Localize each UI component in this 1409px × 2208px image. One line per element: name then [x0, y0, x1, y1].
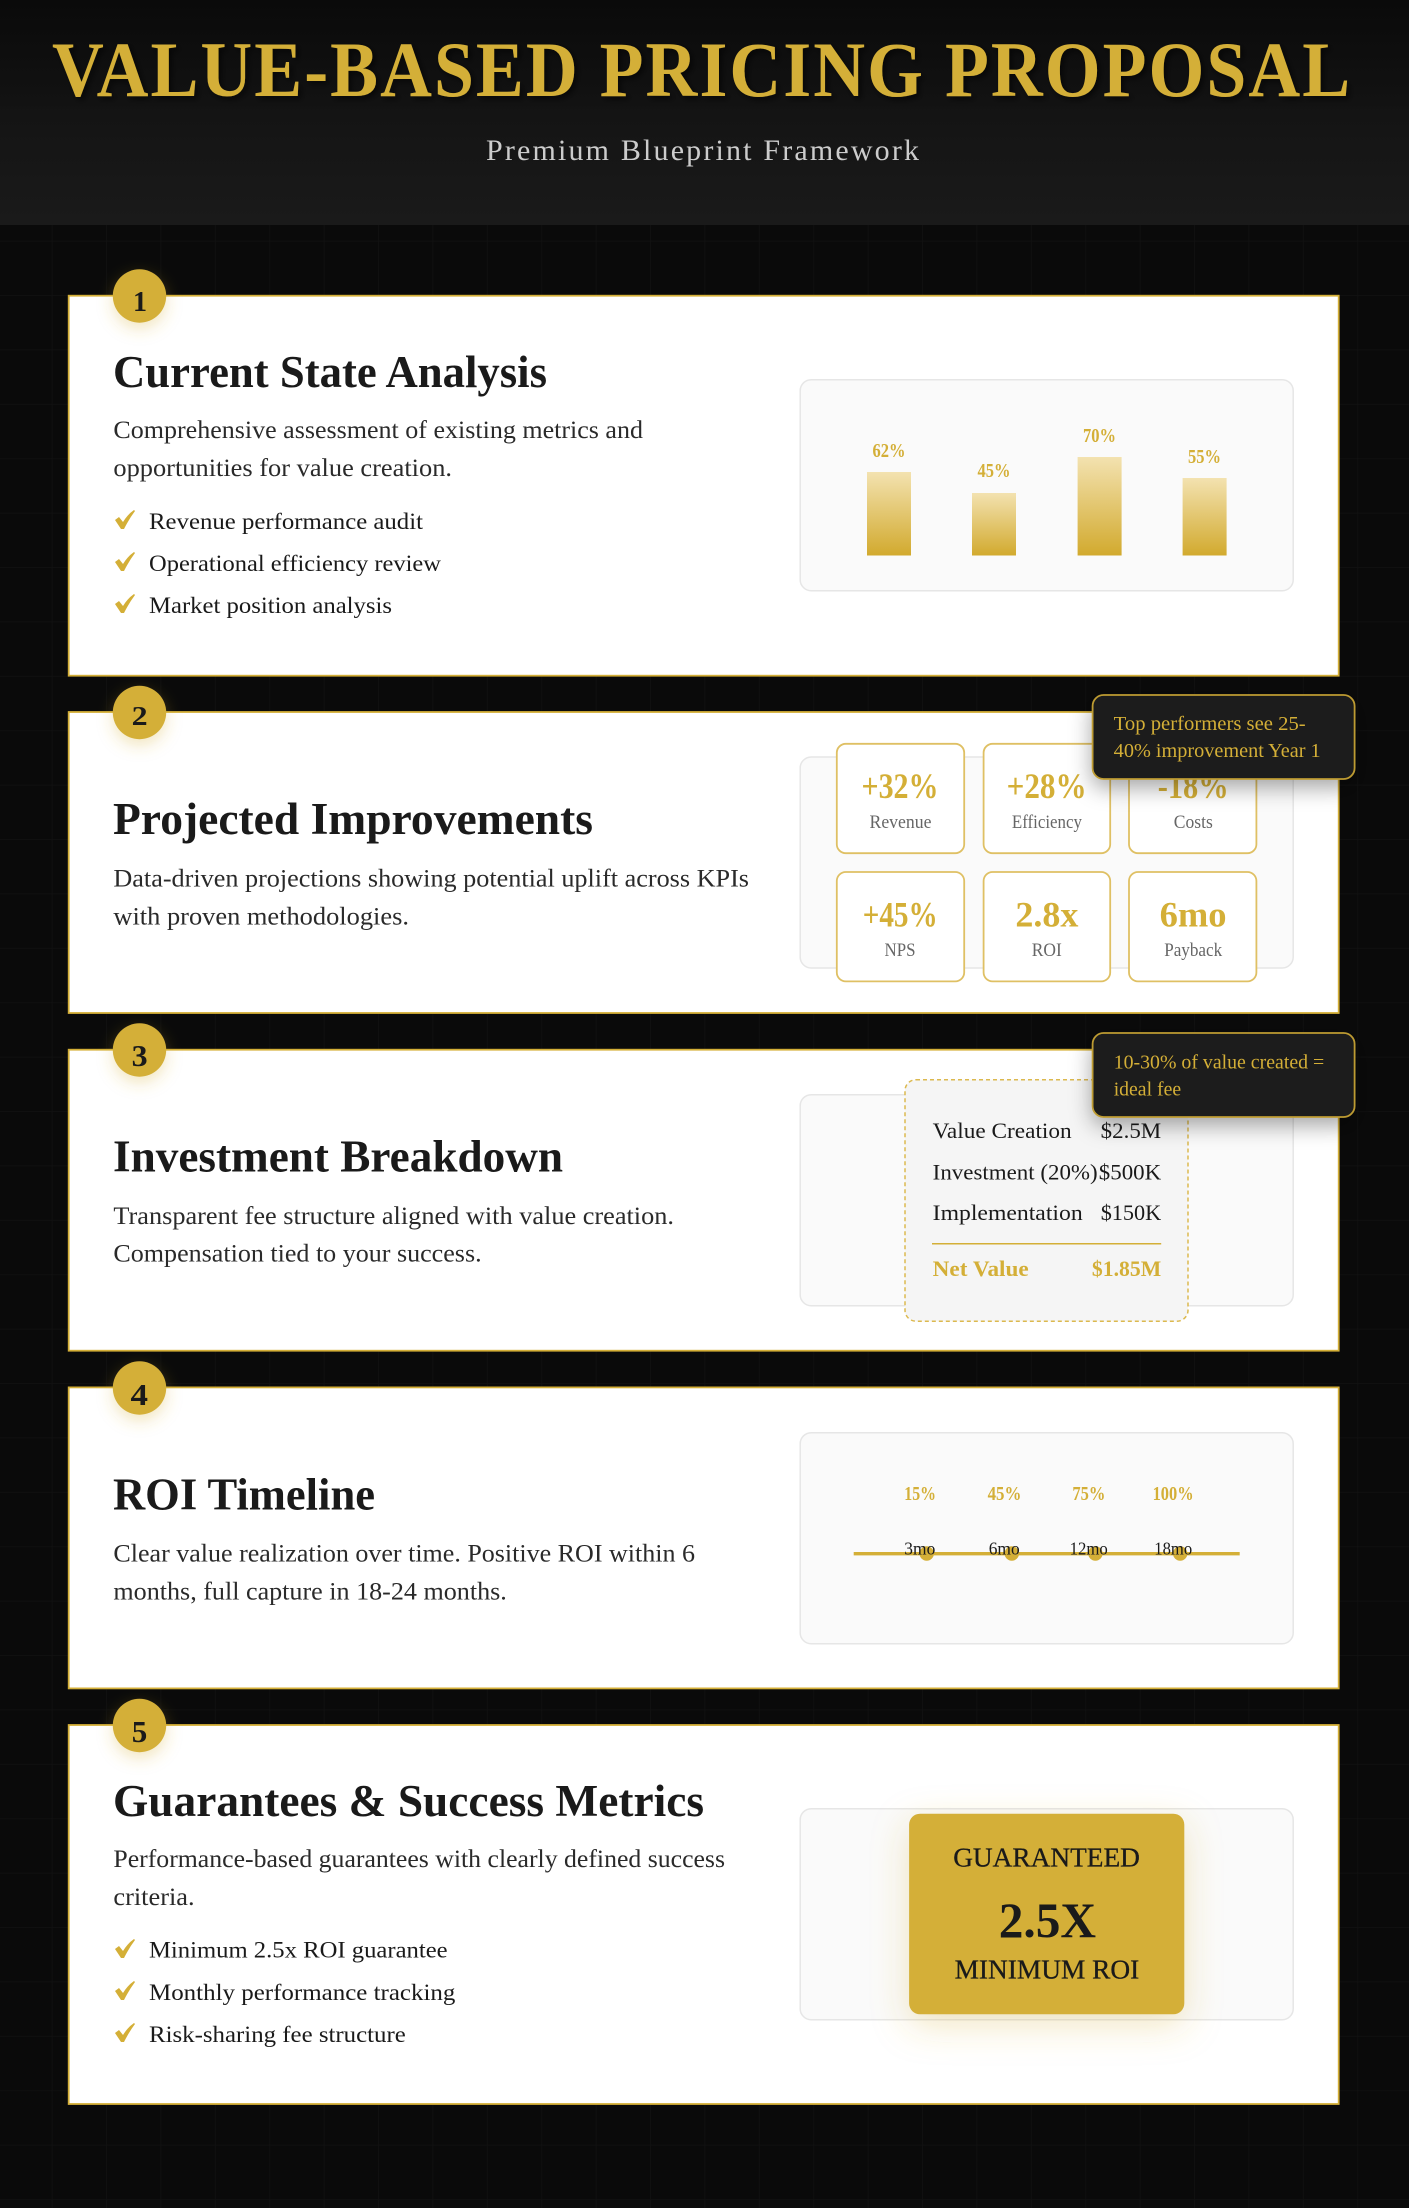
- subtitle: Premium Blueprint Framework: [486, 134, 919, 167]
- timeline chart: [800, 1433, 1293, 1644]
- heading: Investment Breakdown: [113, 1132, 563, 1182]
- guarantee visual: [800, 1809, 1293, 2020]
- timeline chart: 15%: [904, 1484, 936, 1505]
- step badge 4: 4: [130, 1377, 148, 1412]
- callout: top performers: 40% improvement Year 1: [1114, 740, 1321, 762]
- fee table: $2.5M: [1101, 1118, 1161, 1143]
- KPI: costs: -18%: [1158, 766, 1229, 806]
- KPI: efficiency: +28%: [1007, 766, 1087, 806]
- KPI: NPS: +45%: [863, 895, 938, 935]
- panel: Investment Breakdown: [69, 1023, 1355, 1351]
- panel: Guarantees & Success Metrics: [69, 1699, 1339, 2104]
- callout: ideal fee: 10-30% of value created =: [1114, 1051, 1324, 1073]
- heading: Projected Improvements: [113, 794, 593, 844]
- step badge 3: [113, 1023, 166, 1077]
- description: Comprehensive assessment of existing metrics and: [113, 417, 644, 444]
- heading: ROI Timeline: [113, 1470, 375, 1520]
- KPI: payback: Payback: [1164, 941, 1223, 961]
- header: [0, 0, 1409, 225]
- KPI: ROI: [984, 872, 1110, 981]
- guarantee badge: 2.5X: [999, 1892, 1096, 1948]
- checklist: Risk-sharing fee structure: [149, 2022, 406, 2047]
- description: Performance-based guarantees with clearly defined success: [113, 1846, 725, 1873]
- description: [113, 417, 644, 482]
- KPI: NPS: NPS: [884, 941, 916, 961]
- checklist: Monthly performance tracking: [149, 1980, 456, 2005]
- guarantee badge: MINIMUM ROI: [955, 1953, 1139, 1984]
- step badge 1: [113, 269, 166, 323]
- timeline chart: 3mo: [904, 1538, 935, 1558]
- description: Clear value realization over time. Positive ROI within 6: [113, 1541, 695, 1568]
- KPI: revenue: Revenue: [870, 813, 932, 833]
- checklist: Revenue performance audit: [149, 509, 424, 534]
- description: Transparent fee structure aligned with value creation.: [113, 1203, 674, 1230]
- title: VALUE-BASED PRICING PROPOSAL: [52, 27, 1350, 114]
- step badge 5: [113, 1699, 166, 1752]
- panel: Projected Improvements: [69, 686, 1355, 1013]
- description: [113, 1846, 725, 1911]
- KPI: costs: Costs: [1174, 813, 1213, 833]
- bar chart: 45%: [978, 461, 1010, 482]
- step badge 5: 5: [132, 1714, 147, 1749]
- description: [113, 866, 749, 930]
- fee table: [800, 1080, 1293, 1321]
- step badge 2: 2: [132, 701, 148, 731]
- step badge 2: [113, 686, 166, 739]
- KPI: efficiency: Efficiency: [1012, 813, 1083, 833]
- guarantee badge: GUARANTEED: [953, 1842, 1140, 1873]
- checklist: [115, 509, 441, 618]
- KPI: ROI: ROI: [1032, 941, 1062, 961]
- timeline chart: 75%: [1072, 1484, 1105, 1505]
- KPI: efficiency: [984, 744, 1110, 853]
- KPI: costs: [1129, 744, 1256, 853]
- description: criteria.: [113, 1884, 195, 1911]
- fee table: Investment (20%): [933, 1159, 1098, 1184]
- KPI: revenue: +32%: [862, 766, 938, 806]
- step badge 4: [113, 1361, 166, 1415]
- description: Data-driven projections showing potential uplift across KPIs: [113, 866, 749, 892]
- KPI: payback: 6mo: [1160, 895, 1227, 935]
- callout: top performers: [1093, 695, 1355, 779]
- fee table: $150K: [1101, 1200, 1162, 1225]
- bar chart: 70%: [1083, 426, 1116, 447]
- bar chart: 62%: [872, 441, 906, 462]
- checklist: Minimum 2.5x ROI guarantee: [149, 1938, 448, 1963]
- step badge 3: 3: [132, 1038, 148, 1073]
- fee table: $1.85M: [1092, 1256, 1161, 1281]
- description: opportunities for value creation.: [113, 455, 452, 482]
- fee table: Value Creation: [933, 1118, 1072, 1143]
- checklist: [115, 1938, 456, 2047]
- fee table: Net Value: [933, 1256, 1029, 1281]
- KPI: revenue: [837, 744, 964, 853]
- fee table: Implementation: [933, 1200, 1083, 1225]
- bar chart: 55%: [1188, 447, 1221, 468]
- description: [113, 1541, 695, 1605]
- timeline chart: 12mo: [1070, 1538, 1108, 1558]
- guarantee badge: [909, 1814, 1184, 2014]
- heading: Current State Analysis: [113, 347, 547, 397]
- KPI: ROI: 2.8x: [1015, 895, 1078, 935]
- callout: top performers: Top performers see 25-: [1114, 713, 1306, 735]
- callout: ideal fee: ideal fee: [1114, 1079, 1181, 1101]
- KPI grid: [800, 744, 1293, 981]
- timeline chart: 6mo: [989, 1538, 1020, 1558]
- heading: Guarantees & Success Metrics: [113, 1776, 704, 1826]
- description: months, full capture in 18-24 months.: [113, 1578, 507, 1605]
- timeline chart: 100%: [1153, 1484, 1194, 1505]
- panel: Current State Analysis: [69, 269, 1339, 676]
- description: with proven methodologies.: [113, 903, 409, 930]
- timeline chart: 18mo: [1154, 1538, 1192, 1558]
- checklist: Operational efficiency review: [149, 551, 441, 576]
- timeline chart: 45%: [988, 1484, 1021, 1505]
- KPI: payback: [1129, 872, 1256, 981]
- step badge 1: 1: [133, 287, 147, 318]
- description: [113, 1203, 674, 1268]
- panel: ROI Timeline: [69, 1361, 1339, 1688]
- checklist: Market position analysis: [149, 593, 392, 618]
- KPI: NPS: [837, 872, 964, 981]
- callout: ideal fee: [1093, 1033, 1355, 1117]
- fee table: $500K: [1099, 1159, 1162, 1184]
- description: Compensation tied to your success.: [113, 1241, 482, 1268]
- bar chart: [800, 380, 1293, 591]
